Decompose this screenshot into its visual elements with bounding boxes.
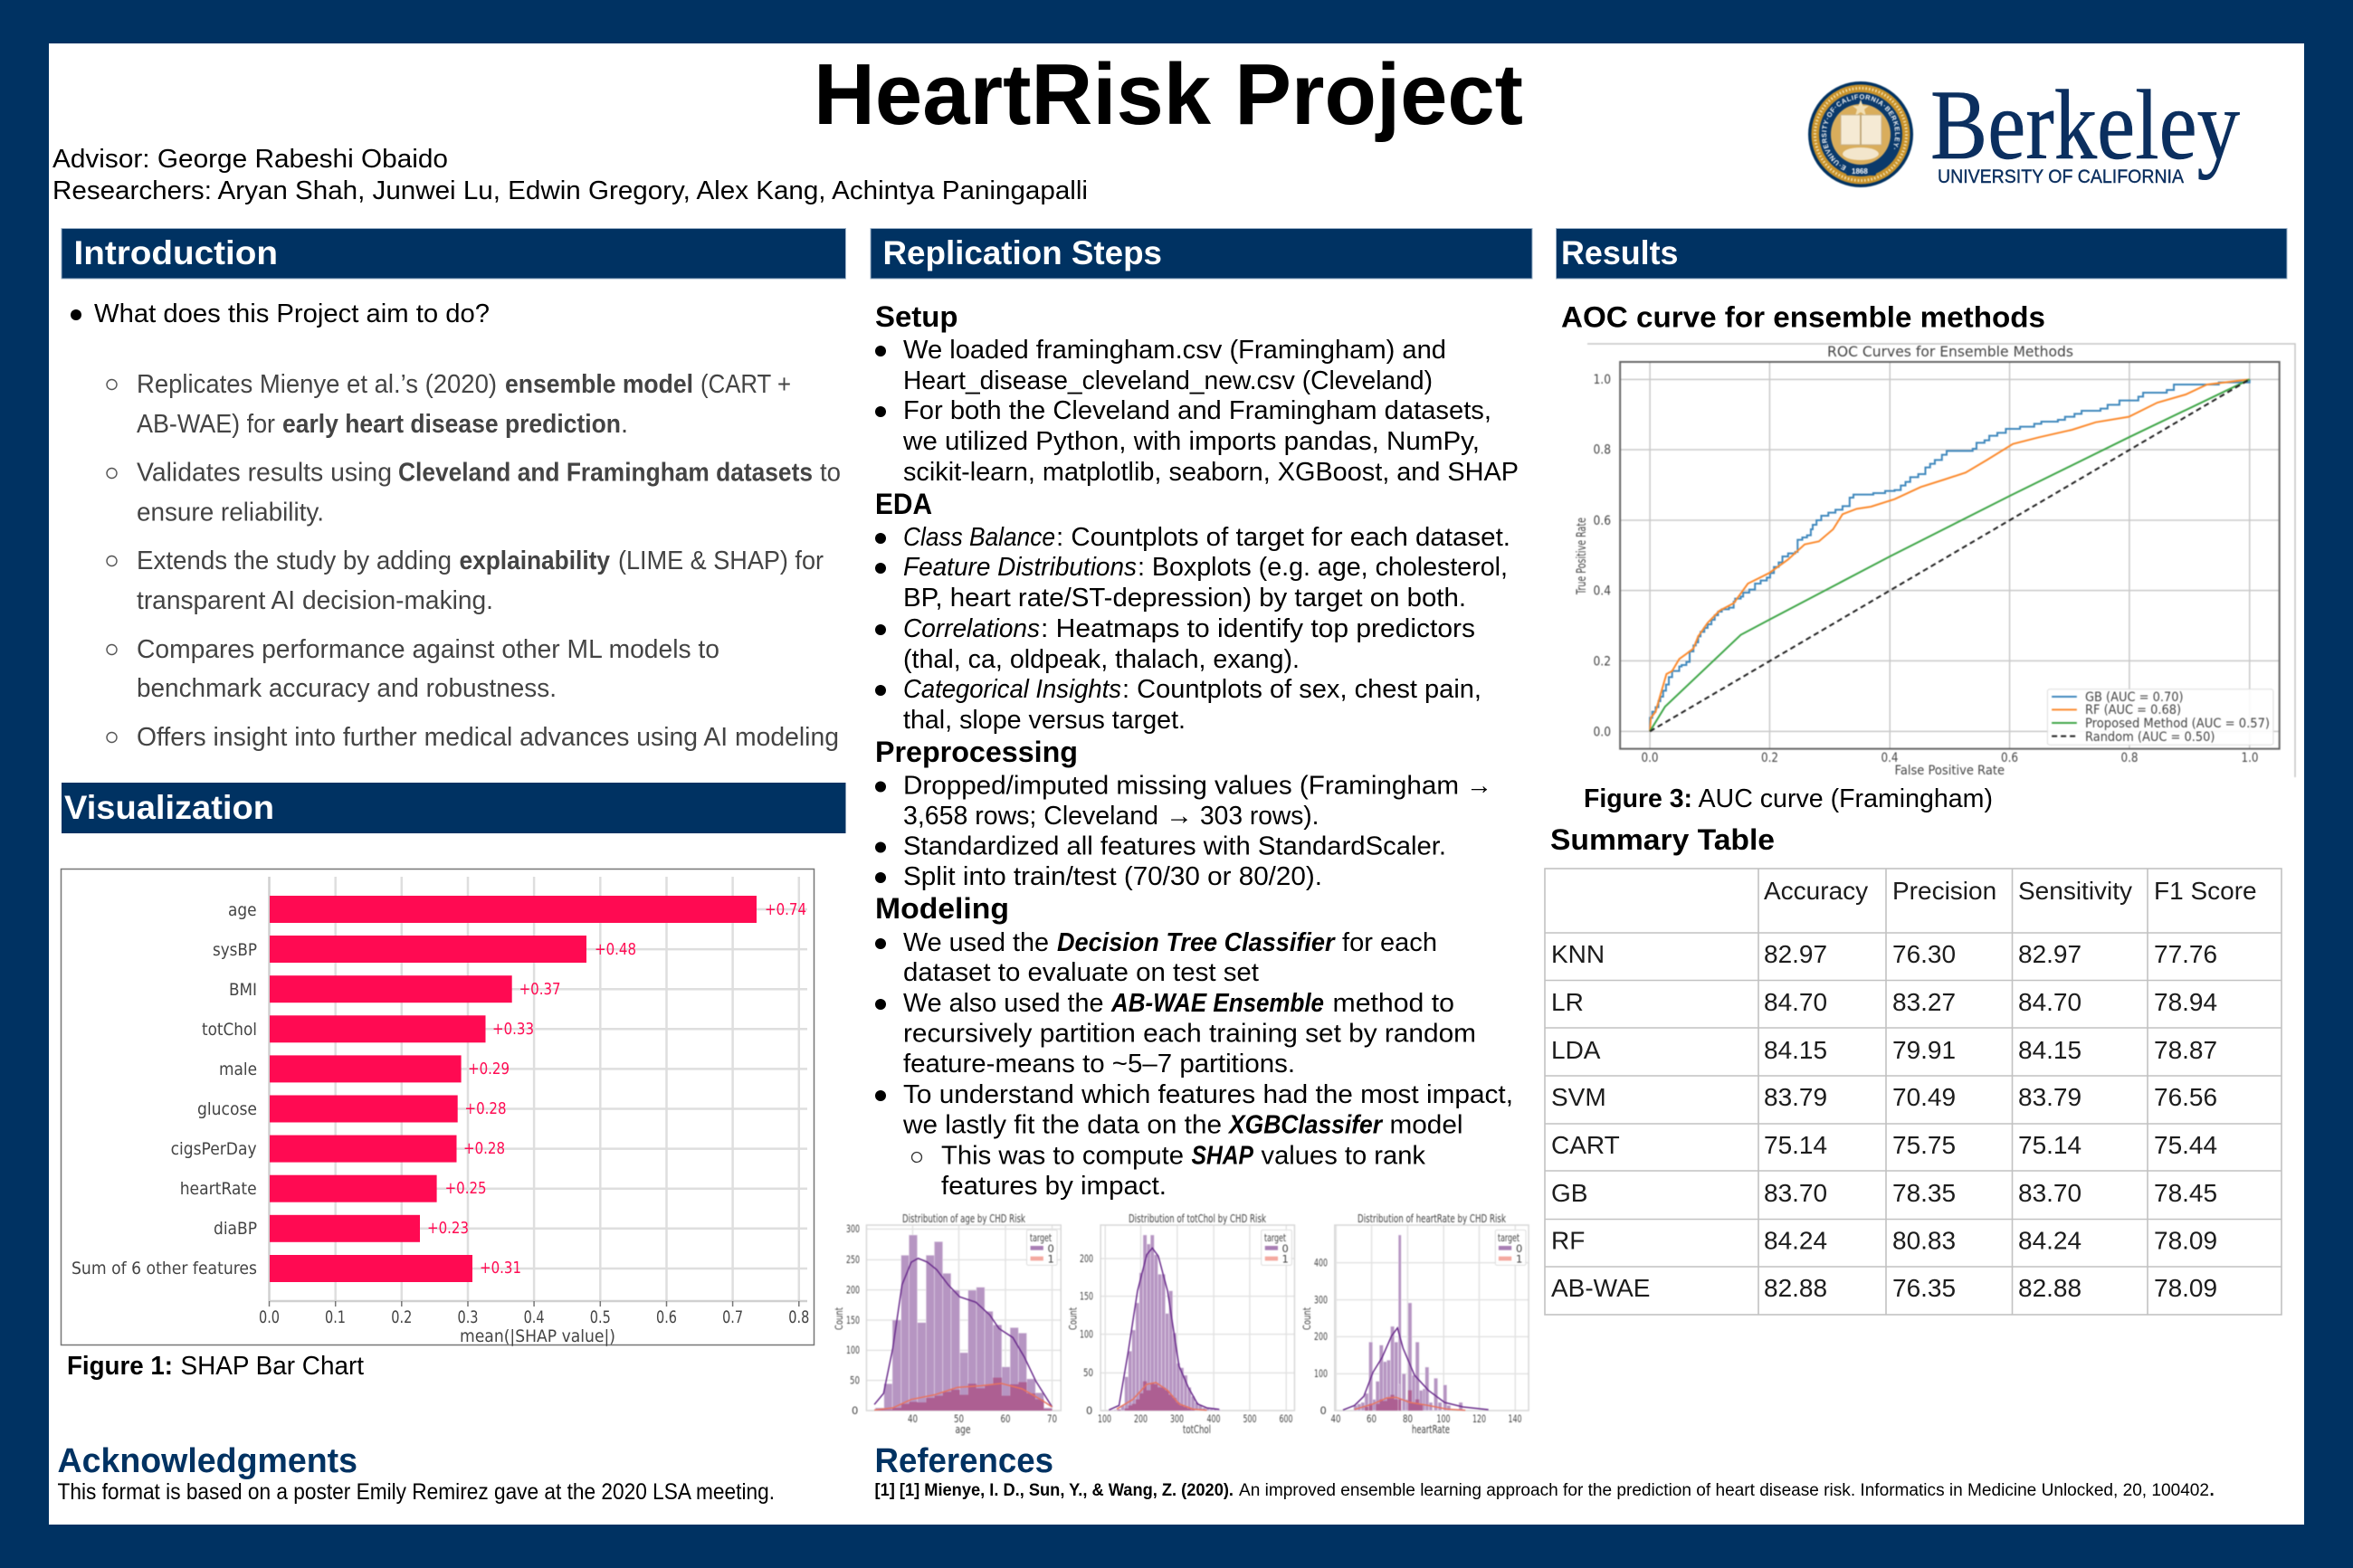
line chart: ROC curves: GB (AUC = 0.70) xyxy=(2085,690,2183,705)
bar chart: SHAP values: +0.28 xyxy=(463,1139,505,1158)
bullet: correlations: Correlations xyxy=(903,614,1040,643)
row: LR: 83.27 xyxy=(1892,988,1956,1016)
histogram: age: 0 xyxy=(1048,1242,1054,1255)
histogram: totChol: 150 xyxy=(1080,1290,1093,1303)
bullet: validates: to xyxy=(820,458,841,487)
bullet: replicates: Replicates Mienye et al.’s (2020) xyxy=(137,370,497,399)
bar chart: SHAP values: +0.37 xyxy=(519,980,561,999)
row: GB: 78.45 xyxy=(2154,1179,2217,1207)
bullet: replicates: ensemble model xyxy=(505,370,693,399)
bullet: XGB classifier: XGBClassifer xyxy=(1227,1111,1384,1140)
row: SVM: SVM xyxy=(1551,1083,1606,1111)
row: SVM: 70.49 xyxy=(1892,1083,1956,1111)
histogram: totChol: 600 xyxy=(1280,1412,1292,1425)
histogram: age: Distribution of age by CHD Risk xyxy=(902,1212,1026,1225)
bar chart: SHAP values: sysBP xyxy=(213,940,257,960)
row: RF: 84.24 xyxy=(1764,1227,1827,1254)
row: CART: CART xyxy=(1551,1131,1620,1159)
bullet: replicates: . xyxy=(621,410,628,439)
panel: acknowledgments xyxy=(58,1442,775,1505)
table header row: Accuracy xyxy=(1764,877,1868,905)
histogram: age xyxy=(833,1212,1061,1436)
histogram: heartRate: 100 xyxy=(1314,1367,1328,1380)
row: AB-WAE: 76.35 xyxy=(1892,1274,1956,1302)
row: AB-WAE: AB-WAE xyxy=(1551,1274,1650,1302)
histogram: totChol: 200 xyxy=(1134,1412,1148,1425)
bullet: AB-WAE ensemble: feature-means to ~5–7 partitions. xyxy=(903,1050,1295,1079)
histogram: totChol: target xyxy=(1264,1231,1286,1244)
row: GB: 78.35 xyxy=(1892,1179,1956,1207)
bar chart: SHAP values: Sum of 6 other features xyxy=(71,1259,257,1278)
bullet: XGB classifier: To understand which features had the most impact, xyxy=(903,1080,1513,1109)
histogram: totChol xyxy=(1066,1212,1294,1436)
bullet: XGB classifier: model xyxy=(1390,1111,1462,1140)
histogram: totChol: Count xyxy=(1066,1307,1079,1330)
line chart: ROC curves: 0.2 xyxy=(1593,654,1611,669)
bar chart: SHAP values: glucose xyxy=(197,1099,257,1119)
histogram: totChol: Distribution of totChol by CHD Risk xyxy=(1129,1212,1267,1225)
row: CART: 75.75 xyxy=(1892,1131,1956,1159)
heading: Introduction xyxy=(62,228,845,279)
histogram: heartRate: 300 xyxy=(1314,1294,1328,1307)
panel: introduction xyxy=(62,228,845,752)
bar chart: SHAP values: +0.74 xyxy=(765,900,806,919)
line chart: ROC curves xyxy=(1575,343,2295,778)
bullet: feature distributions: Feature Distributions xyxy=(903,553,1137,582)
row: KNN: 77.76 xyxy=(2154,940,2217,968)
bullet: loaded data xyxy=(875,336,1446,395)
histogram: totChol: 400 xyxy=(1207,1412,1220,1425)
subheading: Summary Table: Summary Table xyxy=(1550,823,1775,856)
icon: university seal: THE·UNIVERSITY·OF·CALIFORNIA·BERKELEY· xyxy=(1821,94,1900,172)
row: LDA xyxy=(1551,1036,2217,1064)
bullet: AB-WAE ensemble: method to xyxy=(1332,989,1454,1018)
heading: References: References xyxy=(874,1442,1053,1480)
histogram: totChol: 100 xyxy=(1080,1328,1093,1341)
histogram: heartRate: 100 xyxy=(1437,1412,1450,1425)
bullet: feature distributions: BP, heart rate/ST-depression) by target on both. xyxy=(903,584,1466,613)
bullet: categorical insights: Categorical Insights xyxy=(903,675,1121,704)
bullet: decision tree xyxy=(875,928,1437,987)
row: LDA: 78.87 xyxy=(2154,1036,2217,1064)
row: AB-WAE: 78.09 xyxy=(2154,1274,2217,1302)
bullet: categorical insights: : Countplots of sex, chest pain, xyxy=(1122,675,1481,704)
intro question: What does this Project aim to do? xyxy=(94,299,490,328)
wordmark: Berkeley: Berkeley xyxy=(1930,70,2240,180)
bar chart: SHAP values: +0.25 xyxy=(445,1179,487,1198)
reference entry: An improved ensemble learning approach for the prediction of heart disease risk. Informatics in Medicine Unlocked, 20, 100402 xyxy=(1239,1481,2209,1500)
histogram: heartRate: 140 xyxy=(1508,1412,1522,1425)
bar chart: SHAP values: cigsPerDay xyxy=(171,1139,257,1159)
histogram: heartRate: 40 xyxy=(1330,1412,1341,1425)
bullet: extends: explainability xyxy=(460,546,610,575)
bullet: AB-WAE ensemble xyxy=(875,989,1476,1079)
bullet: feature distributions xyxy=(875,553,1508,613)
histogram: heartRate: target xyxy=(1498,1231,1519,1244)
histogram: heartRate: Count xyxy=(1300,1307,1313,1330)
bar chart: SHAP values: +0.23 xyxy=(427,1219,469,1238)
bullet: decision tree: Decision Tree Classifier xyxy=(1057,928,1336,957)
row: RF: 80.83 xyxy=(1892,1227,1956,1254)
histogram: totChol: 50 xyxy=(1083,1366,1093,1379)
bullet: class balance: Class Balance xyxy=(903,523,1055,552)
bar chart: SHAP values: +0.33 xyxy=(492,1020,534,1039)
bar chart: SHAP values: 0.0 xyxy=(259,1307,280,1327)
reference entry: . xyxy=(2210,1481,2215,1500)
bar chart: SHAP values: diaBP xyxy=(214,1219,257,1239)
row: RF xyxy=(1551,1227,2217,1254)
panel: replication steps xyxy=(833,228,1532,1436)
title: HeartRisk Project xyxy=(814,46,1523,143)
row: KNN: 76.30 xyxy=(1892,940,1956,968)
bullet: decision tree: dataset to evaluate on test set xyxy=(903,958,1259,987)
row: CART: 75.14 xyxy=(1764,1131,1827,1159)
bullet: categorical insights xyxy=(875,675,1481,735)
bullet: python imports xyxy=(875,396,1519,487)
line chart: ROC curves: 0.4 xyxy=(1881,751,1899,765)
histogram: heartRate: 400 xyxy=(1314,1256,1328,1269)
row: SVM: 76.56 xyxy=(2154,1083,2217,1111)
histogram: heartRate: 0 xyxy=(1516,1242,1522,1255)
row: LR xyxy=(1551,988,2217,1016)
bar chart: SHAP values: 0.3 xyxy=(458,1307,478,1327)
bullet: loaded data: We loaded framingham.csv (Framingham) and xyxy=(903,336,1446,365)
histogram: age: 100 xyxy=(846,1344,860,1356)
histogram: age: 1 xyxy=(1048,1252,1054,1265)
row: SVM: 83.79 xyxy=(2018,1083,2082,1111)
histogram: totChol: 100 xyxy=(1098,1412,1111,1425)
row: CART: 75.44 xyxy=(2154,1131,2217,1159)
bullet: extends: transparent AI decision-making. xyxy=(137,586,493,615)
bar chart: SHAP values xyxy=(62,869,814,1346)
bullet: split: Split into train/test (70/30 or 80/20). xyxy=(903,862,1322,891)
bullet: correlations: : Heatmaps to identify top predictors xyxy=(1041,614,1475,643)
chart: histograms xyxy=(833,1212,1529,1436)
bullet: python imports: scikit-learn, matplotlib, seaborn, XGBoost, and SHAP xyxy=(903,458,1519,487)
logo: UC Berkeley xyxy=(1807,70,2240,188)
table header row: Precision xyxy=(1892,877,1996,905)
histogram: totChol: 1 xyxy=(1281,1252,1289,1265)
bullet: extends: (LIME & SHAP) for xyxy=(618,546,824,575)
bar chart: SHAP values: totChol xyxy=(202,1020,257,1040)
heading: Acknowledgments: Acknowledgments xyxy=(58,1442,357,1480)
bullet: compares: benchmark accuracy and robustness. xyxy=(137,674,557,703)
panel: references xyxy=(874,1442,2215,1500)
caption: figure 3: AUC curve (Framingham) xyxy=(1698,784,1993,813)
bullet: offers: Offers insight into further medical advances using AI modeling xyxy=(137,723,839,752)
line chart: ROC curves: 0.8 xyxy=(2121,751,2138,765)
line chart: ROC curves: 0.0 xyxy=(1593,725,1611,739)
histogram: age: Count xyxy=(833,1307,845,1330)
histogram: age: 150 xyxy=(846,1314,860,1326)
table header row: Sensitivity xyxy=(2018,877,2132,905)
line chart: ROC curves: 0.0 xyxy=(1642,751,1658,765)
bullet: AB-WAE ensemble: We also used the xyxy=(903,989,1104,1018)
histogram: heartRate: 80 xyxy=(1403,1412,1413,1425)
row: RF: RF xyxy=(1551,1227,1585,1254)
bullet: replicates xyxy=(107,370,791,439)
line chart: ROC curves: 0.6 xyxy=(1593,514,1611,528)
bullet: missing values: Dropped/imputed missing values (Framingham xyxy=(903,771,1459,800)
bullet: decision tree: for each xyxy=(1342,928,1437,957)
row: LDA: 79.91 xyxy=(1892,1036,1956,1064)
sub-bullet: SHAP values: values to rank xyxy=(1262,1142,1425,1171)
bullet: extends: Extends the study by adding xyxy=(137,546,452,575)
subheading: AOC curve: AOC curve for ensemble methods xyxy=(1561,300,2045,333)
sub-bullet: SHAP values xyxy=(912,1142,1425,1201)
row: GB: 83.70 xyxy=(2018,1179,2082,1207)
table header row: F1 Score xyxy=(2154,877,2257,905)
histogram: heartRate: Distribution of heartRate by CHD Risk xyxy=(1358,1212,1507,1225)
heading: Results: Results xyxy=(1561,234,1678,271)
sub-bullet: SHAP values: SHAP xyxy=(1191,1142,1254,1171)
wordmark: University of California: UNIVERSITY OF CALIFORNIA xyxy=(1938,166,2184,187)
table header row xyxy=(1764,877,2257,905)
bullet: loaded data: Heart_disease_cleveland_new.csv (Cleveland) xyxy=(903,366,1433,395)
subheading: EDA: EDA xyxy=(875,488,932,520)
caption: figure 1: SHAP Bar Chart xyxy=(181,1352,364,1381)
bullet: extends xyxy=(107,546,824,615)
bar chart: SHAP values: 0.7 xyxy=(722,1307,743,1327)
bullet: categorical insights: thal, slope versus target. xyxy=(903,706,1186,735)
row: RF: 78.09 xyxy=(2154,1227,2217,1254)
bar chart: SHAP values: mean(|SHAP value|) xyxy=(460,1326,615,1346)
line chart: ROC curves: 0.2 xyxy=(1761,751,1778,765)
line chart: ROC curves: True Positive Rate xyxy=(1575,518,1589,595)
subheading: Setup: Setup xyxy=(875,300,957,333)
histogram: age: 200 xyxy=(846,1283,860,1296)
bullet: missing values xyxy=(875,771,1492,831)
bar chart: SHAP values: +0.28 xyxy=(465,1099,507,1118)
histogram: totChol: 500 xyxy=(1243,1412,1256,1425)
subheading: Preprocessing: Preprocessing xyxy=(875,736,1078,768)
bullet: XGB classifier xyxy=(875,1080,1513,1140)
heading: Results xyxy=(1557,228,2287,279)
bullet: compares: Compares performance against other ML models to xyxy=(137,635,719,664)
histogram: heartRate: 60 xyxy=(1367,1412,1377,1425)
row: CART xyxy=(1551,1131,2217,1159)
row: AB-WAE xyxy=(1551,1274,2217,1302)
bar chart: SHAP values: age xyxy=(228,900,257,920)
bar chart: SHAP values: heartRate xyxy=(180,1179,257,1199)
histogram: totChol: 0 xyxy=(1281,1242,1289,1255)
histogram: totChol: 300 xyxy=(1170,1412,1184,1425)
row: AB-WAE: 82.88 xyxy=(2018,1274,2082,1302)
bullet: replicates: early heart disease prediction xyxy=(282,410,621,439)
row: CART: 75.14 xyxy=(2018,1131,2082,1159)
row: LR: 78.94 xyxy=(2154,988,2217,1016)
bullet: replicates: (CART + xyxy=(700,370,791,399)
row: KNN: 82.97 xyxy=(2018,940,2082,968)
histogram: heartRate: 1 xyxy=(1516,1252,1522,1265)
panel: visualization xyxy=(62,783,845,1381)
histogram: heartRate: 120 xyxy=(1472,1412,1486,1425)
row: LR: 84.70 xyxy=(1764,988,1827,1016)
caption: figure 1: Figure 1: xyxy=(67,1352,173,1381)
bullet: validates xyxy=(107,458,841,527)
heading: Replication Steps xyxy=(871,228,1532,279)
sub-bullet: SHAP values: This was to compute xyxy=(941,1142,1184,1171)
reference entry: [1] [1] Mienye, I. D., Sun, Y., & Wang, Z. (2020). xyxy=(874,1481,1234,1500)
bullet: XGB classifier: we lastly fit the data on the xyxy=(902,1111,1222,1140)
row: LDA: LDA xyxy=(1551,1036,1601,1064)
bullet: AB-WAE ensemble: recursively partition each training set by random xyxy=(903,1019,1476,1048)
line chart: ROC curves: 0.6 xyxy=(2001,751,2018,765)
histogram: age: 70 xyxy=(1047,1412,1057,1425)
line chart: ROC curves: 0.8 xyxy=(1593,443,1611,458)
row: GB xyxy=(1551,1179,2217,1207)
heading: Introduction: Introduction xyxy=(74,234,278,271)
line chart: ROC curves: ROC Curves for Ensemble Methods xyxy=(1827,343,2073,360)
subheading: Modeling: Modeling xyxy=(875,892,1009,925)
heading: Replication Steps: Replication Steps xyxy=(883,234,1162,271)
bullet: missing values: → xyxy=(1166,802,1193,831)
caption: figure 1 xyxy=(67,1352,364,1381)
bullet: validates: ensure reliability. xyxy=(137,498,324,527)
histogram: age: target xyxy=(1030,1231,1052,1244)
bar chart: SHAP values: 0.1 xyxy=(325,1307,346,1327)
line chart: ROC curves: Random (AUC = 0.50) xyxy=(2085,730,2215,745)
row: AB-WAE: 82.88 xyxy=(1764,1274,1827,1302)
caption: figure 3: Figure 3: xyxy=(1584,784,1692,813)
heading: Visualization xyxy=(62,783,845,833)
histogram: age: age xyxy=(956,1423,970,1436)
row: SVM xyxy=(1551,1083,2217,1111)
bullet: validates: Validates results using xyxy=(137,458,392,487)
bullet: validates: Cleveland and Framingham datasets xyxy=(398,458,813,487)
bar chart: SHAP values: BMI xyxy=(229,980,257,1000)
histogram: totChol: totChol xyxy=(1183,1423,1211,1436)
histogram: age: 50 xyxy=(954,1412,964,1425)
row: LDA: 84.15 xyxy=(1764,1036,1827,1064)
row: GB: GB xyxy=(1551,1179,1587,1207)
line chart: ROC curves: False Positive Rate xyxy=(1895,764,2005,778)
bullet: decision tree: We used the xyxy=(903,928,1049,957)
advisor line: Advisor: George Rabeshi Obaido xyxy=(52,145,448,174)
histogram: age: 60 xyxy=(1001,1412,1010,1425)
bullet: replicates: AB-WAE) for xyxy=(137,410,275,439)
histogram: totChol: 200 xyxy=(1080,1252,1093,1265)
row: KNN: KNN xyxy=(1551,940,1605,968)
bar chart: SHAP values: 0.6 xyxy=(656,1307,677,1327)
bar chart: SHAP values: male xyxy=(219,1060,257,1079)
icon: university seal xyxy=(1807,81,1914,188)
bar chart: SHAP values: 0.2 xyxy=(391,1307,412,1327)
researchers line: Researchers: Aryan Shah, Junwei Lu, Edwin Gregory, Alex Kang, Achintya Paningapalli xyxy=(52,176,1088,205)
bullet: feature distributions: : Boxplots (e.g. age, cholesterol, xyxy=(1138,553,1508,582)
bar chart: SHAP values: 0.5 xyxy=(590,1307,611,1327)
line chart: ROC curves: 0.4 xyxy=(1593,584,1611,599)
row: SVM: 83.79 xyxy=(1764,1083,1827,1111)
histogram: totChol: 0 xyxy=(1086,1404,1092,1417)
bullet: correlations xyxy=(875,614,1475,674)
histogram: heartRate: 200 xyxy=(1314,1330,1328,1343)
bar chart: SHAP values: +0.29 xyxy=(468,1060,510,1079)
histogram: age: 250 xyxy=(846,1253,860,1266)
sub-bullet: SHAP values: features by impact. xyxy=(941,1172,1167,1201)
histogram: age: 50 xyxy=(850,1373,860,1386)
bar chart: SHAP values: +0.48 xyxy=(595,940,636,959)
panel: results xyxy=(1545,228,2295,1315)
icon: university seal: 1868 xyxy=(1852,167,1868,176)
table: summary metrics xyxy=(1545,869,2282,1315)
bar chart: SHAP values: 0.4 xyxy=(524,1307,545,1327)
acknowledgment text: This format is based on a poster Emily Remirez gave at the 2020 LSA meeting. xyxy=(58,1479,775,1505)
bullet: missing values: 303 rows). xyxy=(1200,802,1319,831)
row: GB: 83.70 xyxy=(1764,1179,1827,1207)
row: LR: LR xyxy=(1551,988,1584,1016)
row: LDA: 84.15 xyxy=(2018,1036,2082,1064)
row: LR: 84.70 xyxy=(2018,988,2082,1016)
bullet: standardized: Standardized all features with StandardScaler. xyxy=(903,832,1446,861)
histogram: heartRate: 0 xyxy=(1319,1404,1327,1417)
bullet: missing values: 3,658 rows; Cleveland xyxy=(903,802,1158,831)
histogram: heartRate xyxy=(1300,1212,1529,1436)
bullet: AB-WAE ensemble: AB-WAE Ensemble xyxy=(1110,989,1324,1018)
row: KNN: 82.97 xyxy=(1764,940,1827,968)
line chart: ROC curves: 1.0 xyxy=(1593,373,1611,387)
histogram: age: 0 xyxy=(852,1404,858,1417)
bar chart: SHAP values: +0.31 xyxy=(480,1259,521,1278)
line chart: ROC curves: RF (AUC = 0.68) xyxy=(2085,703,2181,717)
row: KNN xyxy=(1551,940,2217,968)
bullet: python imports: we utilized Python, with imports pandas, NumPy, xyxy=(902,427,1480,456)
row: RF: 84.24 xyxy=(2018,1227,2082,1254)
histogram: age: 300 xyxy=(846,1222,860,1235)
histogram: age: 40 xyxy=(908,1412,918,1425)
bullet: class balance: : Countplots of target for each dataset. xyxy=(1056,523,1510,552)
bullet: compares xyxy=(107,635,719,703)
bullet: correlations: (thal, ca, oldpeak, thalach, exang). xyxy=(903,645,1300,674)
line chart: ROC curves: Proposed Method (AUC = 0.57) xyxy=(2085,717,2270,731)
bullet: missing values: → xyxy=(1466,771,1492,800)
bar chart: SHAP values: 0.8 xyxy=(788,1307,809,1327)
line chart: ROC curves: 1.0 xyxy=(2241,751,2259,765)
bullet: python imports: For both the Cleveland and Framingham datasets, xyxy=(903,396,1491,425)
histogram: heartRate: heartRate xyxy=(1412,1423,1450,1436)
heading: Visualization: Visualization xyxy=(64,789,274,826)
